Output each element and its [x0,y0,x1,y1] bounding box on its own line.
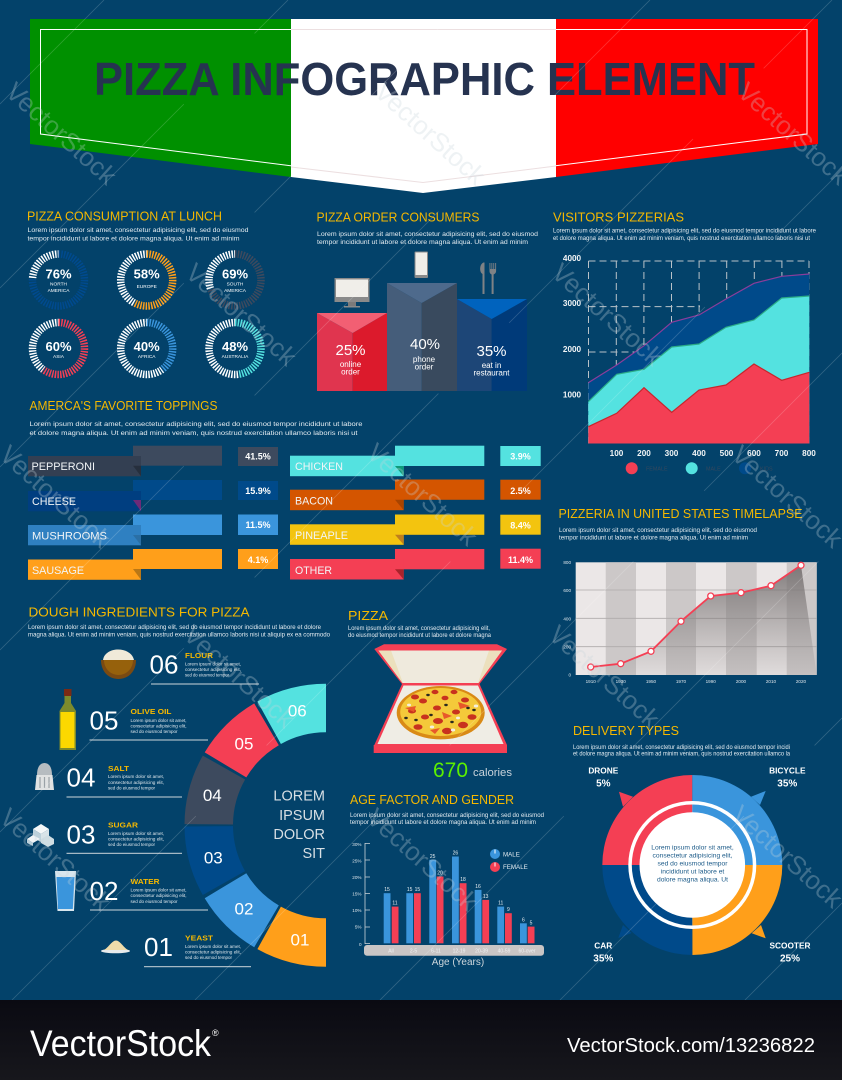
gauge: europe 58%: EUROPE [137,284,157,290]
ribbon: cheese [28,480,278,511]
heading: PIZZA [348,609,389,623]
panel: america's favorite toppings: et dolore magna aliqua. Ut enim ad minim veniam, quis nostrud exercitation ullamco laboris nisi ut [30,430,358,437]
axis labels: 200 [563,644,571,650]
panel: visitors pizzerias: et dolore magna aliqua. Ut enim ad minim veniam, quis nostrud exercitation ullamco laboris nisi ut [553,235,810,242]
bar chart: 2-5 [410,948,417,954]
ribbon: pineapple [290,514,541,545]
icon: open pizza box [374,644,507,753]
watermark: VectorStock [361,802,484,917]
y axis labels: 1000 [563,390,582,400]
watermark: VectorStock [361,437,484,552]
item 06 flour: FLOUR [185,651,214,660]
ribbon: pepperoni: PEPPERONI [32,461,95,473]
ribbon: bacon: 2.5% [510,486,531,496]
panel: pizza order consumers: tempor incididunt ut labore et dolore magna aliqua. Ut enim ad minim [317,239,528,246]
bar values: 15 [415,887,420,893]
title: PIZZA INFOGRAPHIC ELEMENT [94,53,755,105]
ribbon: mushrooms [28,514,278,545]
item 02 water: sed do eiusmod tempor [130,899,178,905]
calories [433,759,513,782]
semicircle segmented diagram: 01 [291,930,309,949]
description: Lorem ipsum dolor sit amet, consectetur adipisicing elit, sed do eiusmod [350,812,544,819]
area chart [563,254,816,474]
panel: pizza [348,609,513,782]
semicircle segmented diagram: 02 [235,899,253,918]
bar: eat in restaurant 35%: restaurant [473,368,510,378]
line chart: 1910 [586,679,596,684]
footer url: VectorStock.com/13236822 [567,1035,815,1057]
semicircle segmented diagram: 05 [235,734,253,753]
gauge: south america 69% [209,254,261,306]
label: car: CAR [594,940,612,950]
gauge: north america 76%: AMERICA [48,288,70,294]
item 03 sugar: SUGAR [108,820,139,830]
gauge: africa 40%: 40% [134,339,160,354]
x axis labels: 200 [637,449,651,458]
line chart: 1930 [616,679,626,684]
footer band: ® [212,1028,219,1038]
label: car [593,940,613,965]
gauge: australia 48% [209,322,261,374]
bar chart: 0 [359,942,362,947]
ribbon: mushrooms: MUSHROOMS [32,530,107,542]
item 04 salt: 04 [66,762,95,792]
panel: pizza order consumers [316,210,538,391]
watermark: VectorStock [546,257,669,372]
bar: phone order 40%: phone [413,355,436,364]
ribbon: other: 11.4% [508,555,533,565]
item 03 sugar: sed do eiusmod tempor [108,842,155,848]
item 04 salt: sed do eiusmod tempor [108,786,155,792]
bar values: 26 [453,850,458,856]
heading: AGE FACTOR AND GENDER [350,793,514,807]
panel: pizzeria in united states timelapse: tempor incididunt ut labore et dolore magna aliqua. Ut enim ad minim [559,534,748,542]
bar chart: 12-19 [453,948,466,954]
item 03 sugar: 03 [66,820,95,850]
item 01 yeast: consectetur adipisicing elit, [185,950,241,956]
watermark [0,76,842,917]
ribbon: chicken: CHICKEN [295,461,343,473]
semicircle segmented diagram: 04 [203,786,222,805]
watermark: VectorStock [180,257,303,372]
bar: phone order 40%: order [415,362,434,372]
gauge: asia 60%: ASIA [53,354,65,360]
item 05 olive oil: consectetur adipisicing elit, [130,724,186,730]
semicircle segmented diagram [184,684,326,967]
ribbon: sausage [28,549,278,580]
ribbon: pepperoni [28,446,278,476]
item 03 sugar [66,820,182,854]
x axis labels: 400 [692,449,706,458]
legend: FEMALE [503,864,528,871]
heading: AMERCA'S FAVORITE TOPPINGS [30,399,218,413]
donut chart: sed do eiusmod tempor [658,860,728,868]
watermark: VectorStock [0,76,123,191]
gauge: south america 69%: AMERICA [224,288,247,294]
y axis labels: 3000 [563,299,582,308]
description: Lorem ipsum dolor sit amet, consectetur adipisicing elit, sed do eiusmod tempor incididunt ut labore [553,228,816,234]
bar chart: 30% [352,842,362,847]
x axis labels: 500 [720,449,734,458]
label: bicycle [769,765,806,790]
item 06 flour: 06 [150,650,178,680]
pizza [397,686,485,739]
ribbon: bacon: BACON [295,496,333,508]
bar values: 15 [407,887,413,893]
item 05 olive oil: Lorem ipsum dolor sit amet, [130,718,186,724]
description: Lorem ipsum dolor sit amet, consectetur adipisicing elit, sed do eiusmod tempor incidi [573,744,790,751]
bar values: 18 [460,877,466,883]
gauge: africa 40%: AFRICA [138,354,156,360]
gauge: north america 76%: NORTH [50,282,68,288]
ribbon: chicken [290,446,541,476]
item 03 sugar: consectetur adipisicing elit, [108,836,164,842]
ribbon: pineapple: 8.4% [510,520,531,530]
panel: age factor and gender: tempor incididunt ut labore et dolore magna aliqua. Ut enim ad minim [350,819,536,826]
icon: sugar cubes [27,824,54,847]
item 02 water [90,876,208,910]
bar chart: 6-11 [431,948,441,954]
donut chart: Lorem ipsum dolor sit amet, [651,844,734,851]
bar chart: Age (Years) [432,957,484,968]
panel: pizza: do eiusmod tempor incididunt ut labore et dolore magna [348,632,491,639]
bar chart: 15% [352,892,362,896]
donut chart: consectetur adipisicing elit, [653,852,733,859]
bar: online order 25%: online [340,360,362,369]
x axis labels [610,449,816,458]
title banner: Italian flag [30,19,818,193]
center label: lorem ipsum dolor sit: IPSUM [279,808,325,824]
axis labels: 400 [563,616,571,622]
legend: KIDS [760,466,773,472]
donut chart: dolore magna aliqua. Ut [657,876,728,884]
icon: smartphone [414,252,428,278]
label: drone: 5% [596,779,611,790]
gauge: asia 60%: 60% [45,339,72,354]
x axis labels: 300 [665,449,679,458]
gauge: australia 48%: AUSTRALIA [222,354,249,360]
x axis labels: 600 [747,449,761,458]
item 02 water: consectetur adipisicing elit, [130,893,186,899]
bar: phone order 40%: 40% [410,336,440,353]
y axis labels: 2000 [563,345,582,354]
heading: PIZZERIA IN UNITED STATES TIMELAPSE [558,507,802,521]
item 01 yeast: sed do eiusmod tempor [185,955,232,961]
heading: VISITORS PIZZERIAS [553,210,684,224]
bar chart: 5% [355,924,362,930]
legend [626,462,773,474]
gauge: europe 58%: 58% [134,266,160,282]
gauge: europe 58% [121,254,173,306]
bar: eat in restaurant 35% [457,299,527,391]
item 02 water: 02 [90,876,118,906]
bar: online order 25%: order [341,368,360,376]
legend [490,849,528,872]
label: scooter: SCOOTER [769,940,811,950]
icon: flour bowl [101,650,136,679]
ribbon: pepperoni: 41.5% [245,452,271,462]
icon: olive oil bottle [60,689,76,750]
item 05 olive oil: 05 [90,706,118,736]
bar: eat in restaurant 35%: 35% [476,343,507,360]
panel: dough ingredients for pizza: magna aliqua. Ut enim ad minim veniam, quis nostrud exercitation ullamco laboris nisi ut aliquip ex ea commodo [28,632,330,638]
bar values: 15 [384,887,390,893]
heading: PIZZA CONSUMPTION AT LUNCH [27,210,222,224]
bar: eat in restaurant 35%: eat in [482,361,501,370]
panel: age factor and gender [350,793,544,968]
bar values: 20 [437,870,443,876]
bar chart: 20% [352,875,362,880]
x axis labels: 100 [610,449,624,458]
axis labels: 0 [568,672,571,678]
bar chart: 10% [352,908,362,913]
axis labels: 600 [563,588,571,593]
calories: 670 [433,759,468,782]
footer band [0,1000,842,1080]
item 02 water: Lorem ipsum dolor sit amet, [130,888,186,894]
ribbon: chicken: 3.9% [510,452,531,462]
gauge: asia 60% [32,322,84,374]
bar chart: 20-39 [475,948,488,954]
panel: delivery types: et dolore magna aliqua. Ut enim ad minim veniam, quis nostrud exercitation ullamco la [573,751,790,758]
icon: knife and fork [480,262,496,294]
description: Lorem ipsum dolor sit amet, consectetur adipisicing elit, sed do eiusmod [317,231,538,238]
label: drone [588,765,619,790]
item 04 salt: SALT [108,764,129,773]
calories: calories [473,767,513,779]
axis labels [563,560,571,678]
footer logo: VectorStock [30,1023,211,1064]
bar values: 6 [522,917,525,923]
description: Lorem ipsum dolor sit amet, consectetur adipisicing elit, sed do eiusmod [28,227,249,234]
heading: DOUGH INGREDIENTS FOR PIZZA [28,606,250,620]
bar chart: 25% [352,858,362,864]
item 01 yeast [144,932,251,967]
line chart: 2000 [736,679,747,684]
item 04 salt: consectetur adipisicing elit, [108,780,164,786]
bar values: 13 [483,894,489,900]
panel: pizza consumption at lunch: tempor incididunt ut labore et dolore magna aliqua. Ut enim ad minim [28,236,240,242]
bar values: 25 [430,854,436,860]
label: bicycle: BICYCLE [769,765,806,775]
item 01 yeast: YEAST [185,934,213,942]
center label: lorem ipsum dolor sit: DOLOR [273,827,325,843]
heading: DELIVERY TYPES [573,724,679,738]
icon: salt shaker [35,763,54,790]
item 06 flour: Lorem ipsum dolor sit amet, [185,662,241,668]
ribbon: other: OTHER [295,565,332,577]
item 05 olive oil: sed do eiusmod tempor [130,729,178,735]
ribbon: mushrooms: 11.5% [245,520,271,530]
watermark: VectorStock [369,76,492,191]
line chart [563,560,817,684]
watermark: VectorStock [178,619,301,734]
center label: lorem ipsum dolor sit: LOREM [273,788,325,804]
gauge: south america 69%: 69% [222,266,248,282]
donut chart [602,775,782,955]
item 01 yeast: 01 [144,932,173,962]
description: Lorem ipsum dolor sit amet, consectetur adipisicing elit, sed do eiusmod tempor incididunt ut labore et dolore [28,624,321,631]
gauge: south america 69%: SOUTH [227,282,244,288]
label: bicycle: 35% [777,779,797,790]
bar: online order 25%: 25% [335,342,366,359]
line chart: 1950 [646,679,657,684]
semicircle segmented diagram: 06 [288,702,307,721]
donut chart: incididunt ut labore et [661,868,724,876]
gauge: north america 76% [32,254,84,306]
bar values: 16 [475,884,481,890]
item 03 sugar: Lorem ipsum dolor sit amet, [108,831,164,837]
icon: desktop monitor [334,278,370,308]
line chart: 1970 [676,679,687,684]
panel: america's favorite toppings [28,399,541,580]
bar values: 9 [507,907,510,913]
legend: MALE [706,466,721,472]
icon: glass of water [55,871,76,911]
bar chart: All [388,948,394,954]
heading: PIZZA ORDER CONSUMERS [316,210,480,224]
panel: pizzeria in united states timelapse [558,507,817,684]
panel: delivery types [573,724,811,965]
bar: online order 25% [317,313,387,391]
ribbon: sausage: SAUSAGE [32,565,84,577]
bar values [384,850,533,927]
semicircle segmented diagram: 03 [204,848,223,867]
bar chart: 60-over [519,948,536,954]
label: car: 35% [593,954,613,965]
label: drone: DRONE [588,765,619,775]
item 02 water: WATER [130,877,160,886]
y axis labels: 4000 [563,254,582,263]
bar chart [352,842,544,968]
bar chart: 40-59 [498,948,511,954]
description: Lorem ipsum dolor sit amet, consectetur adipisicing elit, sed do eiusmod [559,527,757,534]
item 04 salt [66,762,182,798]
ribbon: pineapple: PINEAPLE [295,530,348,542]
line chart: 1990 [706,679,716,684]
item 05 olive oil: OLIVE OIL [130,707,172,716]
axis labels: 800 [563,560,571,565]
legend: MALE [503,852,520,858]
ribbon: cheese: CHEESE [32,496,76,508]
item 04 salt: Lorem ipsum dolor sit amet, [108,774,164,780]
ribbon: bacon [290,480,541,510]
watermark: VectorStock [543,619,666,734]
description: Lorem ipsum dolor sit amet, consectetur adipisicing elit, [348,625,490,632]
x axis labels: 700 [775,449,789,458]
panel: pizza consumption at lunch [27,210,261,374]
ribbon: cheese: 15.9% [245,486,271,496]
item 06 flour: sed do eiusmod tempor [185,672,229,678]
item 05 olive oil [90,706,208,740]
bar values: 5 [530,921,533,927]
line chart: 2010 [766,679,777,684]
x axis labels: 800 [802,449,816,458]
center label: lorem ipsum dolor sit: SIT [302,846,325,862]
ribbon: other [290,549,541,580]
gauge: north america 76%: 76% [45,266,72,282]
ribbon: sausage: 4.1% [248,555,268,565]
item 06 flour: consectetur adipisicing elit, [185,667,241,673]
bar: phone order 40% [387,283,457,391]
label: scooter: 25% [780,954,800,965]
y axis labels [563,254,582,400]
gauge: africa 40% [121,322,173,374]
panel: dough ingredients for pizza [27,606,330,967]
age axis band [364,945,544,956]
icon: yeast pile [101,940,130,953]
item 06 flour [150,650,259,684]
center label: lorem ipsum dolor sit [273,788,325,862]
bar values: 11 [498,901,504,907]
gauge: australia 48%: 48% [222,339,248,354]
line chart: 2020 [796,679,807,684]
bar values: 11 [392,901,398,907]
panel: visitors pizzerias [553,210,816,474]
legend: FEMALE [646,466,668,472]
item 01 yeast: Lorem ipsum dolor sit amet, [185,944,241,950]
description: Lorem ipsum dolor sit amet, consectetur adipisicing elit, sed do eiusmod tempor incididunt ut labore [30,421,363,428]
label: scooter [769,940,811,965]
